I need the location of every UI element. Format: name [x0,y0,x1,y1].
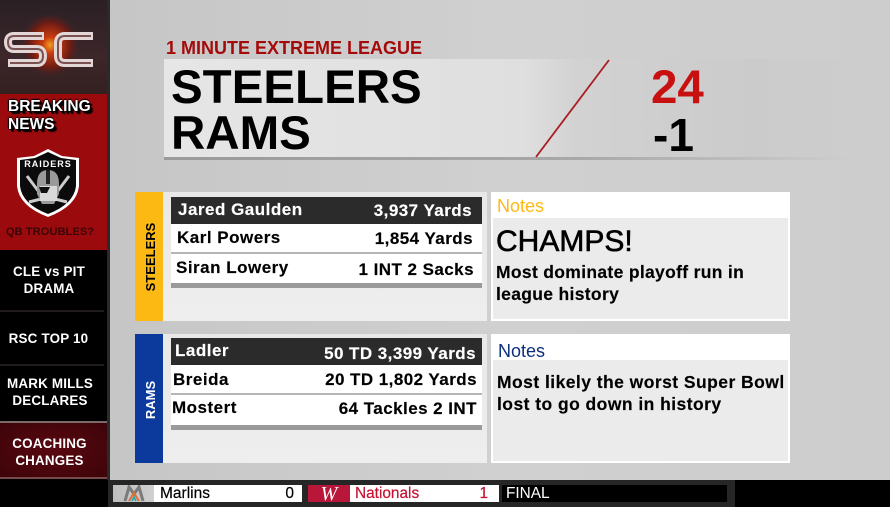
banner shadow [164,157,854,160]
game status [502,485,727,502]
ticker strip [108,480,735,507]
breaking news label [8,98,94,133]
menu: coaching changes: CHANGES [15,453,84,468]
row: Siran Lowery [171,254,482,288]
team tab: Rams: RAMS [143,380,158,419]
team name: Steelers: STEELERS [171,61,422,114]
score: Marlins: Marlins [160,485,210,502]
row: Ladler: Ladler [175,341,229,360]
menu: CLE vs PIT: CLE vs PIT [13,264,85,279]
row: Mostert: 64 Tackles 2 INT [339,399,477,418]
stat rows: Steelers [171,197,482,288]
row: Karl Powers: Karl Powers [177,228,281,247]
notes header: Notes [498,341,545,361]
notes header: Notes [497,196,544,216]
scoreboard banner [164,59,854,158]
panel: Rams notes [491,334,790,463]
row: Ladler [171,338,482,365]
left sidebar [0,0,110,480]
row: Siran Lowery: 1 INT 2 Sacks [359,260,474,279]
menu: RSC top 10: RSC TOP 10 [9,331,88,346]
score: Marlins [154,485,302,502]
QB troubles label: QB TROUBLES? [6,226,94,238]
team tab: Rams [135,334,163,463]
breaking news label: BREAKING [8,98,91,115]
row: Breida: 20 TD 1,802 Yards [325,370,477,389]
icon: Nationals logo [308,485,350,502]
notes text [497,372,785,414]
team tab: Steelers: STEELERS [143,223,158,291]
score: Nationals [350,485,499,502]
row: Karl Powers: 1,854 Yards [375,229,473,248]
icon: Marlins logo [113,485,154,502]
score: Nationals: 1 [479,485,488,502]
stat rows: Rams [171,338,482,430]
notes header [493,334,790,360]
headline: Champs: CHAMPS! [496,225,633,258]
row: Breida: Breida [173,370,229,389]
game status: FINAL [506,485,550,502]
league label: 1 MINUTE EXTREME LEAGUE [166,38,422,58]
diagonal slash [535,60,610,158]
row: Mostert: Mostert [172,398,237,417]
menu: coaching changes: COACHING [12,436,87,451]
icon: Raiders shield [17,149,79,217]
sidebar edge [107,0,110,507]
row: Jared Gaulden: Jared Gaulden [178,200,303,219]
team name: Rams: RAMS [171,107,311,160]
menu: CLE vs PIT [13,264,85,296]
score: Marlins: 0 [285,485,294,502]
row: Mostert [171,395,482,430]
bottom ticker [0,480,890,507]
icon: SC logo [4,15,93,74]
breaking news label: NEWS [8,116,54,133]
row: Jared Gaulden [171,197,482,224]
panel: Rams stats [135,334,487,463]
team tab: Steelers [135,192,163,321]
row: Jared Gaulden: 3,937 Yards [374,201,472,220]
row: Breida [171,365,482,395]
row: Siran Lowery: Siran Lowery [176,258,289,277]
menu: coaching changes [0,421,107,479]
menu: CLE vs PIT: DRAMA [24,281,74,296]
score: Steelers: 24 [651,61,704,114]
notes header [493,192,790,218]
icon: Raiders shield: RAIDERS [24,159,72,169]
menu: Mark Mills [7,376,93,408]
breaking news panel [0,94,107,250]
menu: Mark Mills: MARK MILLS [7,376,93,391]
notes text: Most dominate playoff run in [496,262,744,282]
panel: Steelers stats [135,192,487,321]
SC logo panel [0,0,107,94]
row: Karl Powers [171,224,482,254]
notes text: lost to go down in history [497,394,722,414]
row: Ladler: 50 TD 3,399 Yards [324,344,476,363]
notes text [496,262,744,304]
menu: Mark Mills: DECLARES [12,393,88,408]
icon: Nationals logo: W [321,483,337,505]
panel: Steelers notes [491,192,790,321]
score: Rams: -1 [653,109,694,161]
notes text: league history [496,284,619,304]
notes text: Most likely the worst Super Bowl [497,372,785,392]
score: Nationals: Nationals [355,485,419,502]
